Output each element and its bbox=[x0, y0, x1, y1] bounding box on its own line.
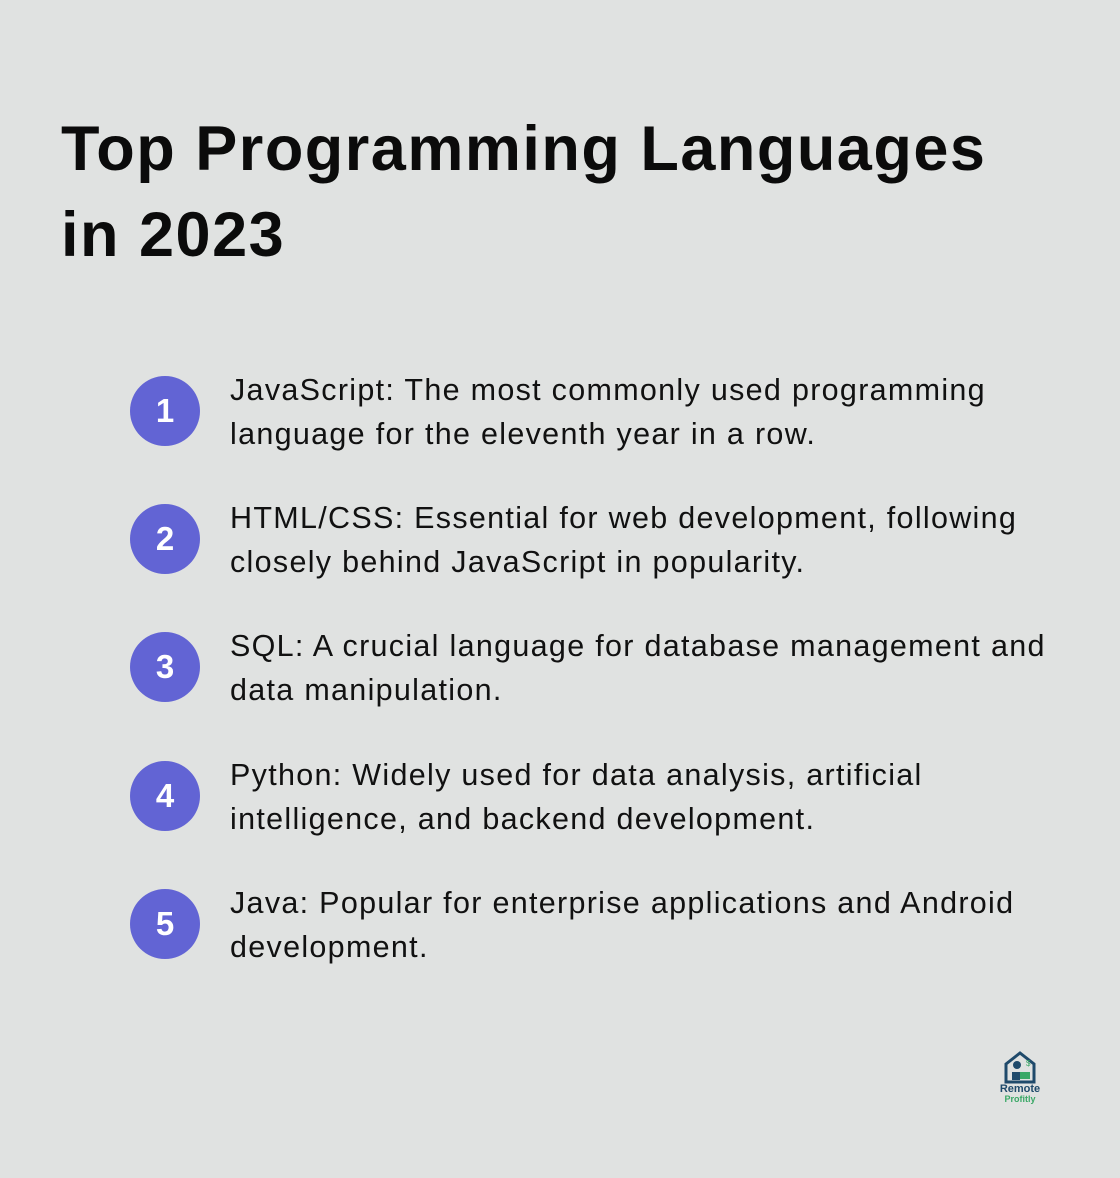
text 1 bbox=[230, 373, 986, 451]
text 1: language for the eleventh year in a row. bbox=[230, 417, 816, 451]
icon: number 5 bbox=[130, 889, 200, 959]
icon: number 4 bbox=[130, 761, 200, 831]
logo: Remote bbox=[1000, 1083, 1040, 1095]
text 4: Python: Widely used for data analysis, artificial bbox=[230, 758, 923, 792]
text 2: closely behind JavaScript in popularity. bbox=[230, 545, 805, 579]
icon: number 3 bbox=[130, 632, 200, 702]
title bbox=[61, 114, 986, 270]
item 2 bbox=[130, 501, 1017, 579]
text 2: HTML/CSS: Essential for web development, following bbox=[230, 501, 1017, 535]
icon: number 2: 2 bbox=[156, 520, 174, 557]
icon: number 3: 3 bbox=[156, 648, 174, 685]
icon: number 5: 5 bbox=[156, 905, 174, 942]
logo: $ bbox=[1026, 1059, 1031, 1068]
item 1 bbox=[130, 373, 986, 451]
text 5: development. bbox=[230, 930, 429, 964]
text 4: intelligence, and backend development. bbox=[230, 802, 815, 836]
item 3 bbox=[130, 629, 1046, 707]
text 5 bbox=[230, 886, 1014, 964]
text 3: SQL: A crucial language for database management and bbox=[230, 629, 1046, 663]
text 5: Java: Popular for enterprise applications and Android bbox=[230, 886, 1014, 920]
item 5 bbox=[130, 886, 1014, 964]
title: Top Programming Languages bbox=[61, 114, 986, 184]
text 4 bbox=[230, 758, 923, 836]
icon: number 1: 1 bbox=[156, 392, 174, 429]
logo: Profitly bbox=[1004, 1094, 1036, 1104]
icon: number 2 bbox=[130, 504, 200, 574]
logo bbox=[1000, 1051, 1040, 1104]
icon: number 4: 4 bbox=[156, 777, 174, 814]
text 1: JavaScript: The most commonly used programming bbox=[230, 373, 986, 407]
icon: number 1 bbox=[130, 376, 200, 446]
text 3: data manipulation. bbox=[230, 673, 503, 707]
text 2 bbox=[230, 501, 1017, 579]
item 4 bbox=[130, 758, 923, 836]
title: in 2023 bbox=[61, 200, 285, 270]
text 3 bbox=[230, 629, 1046, 707]
